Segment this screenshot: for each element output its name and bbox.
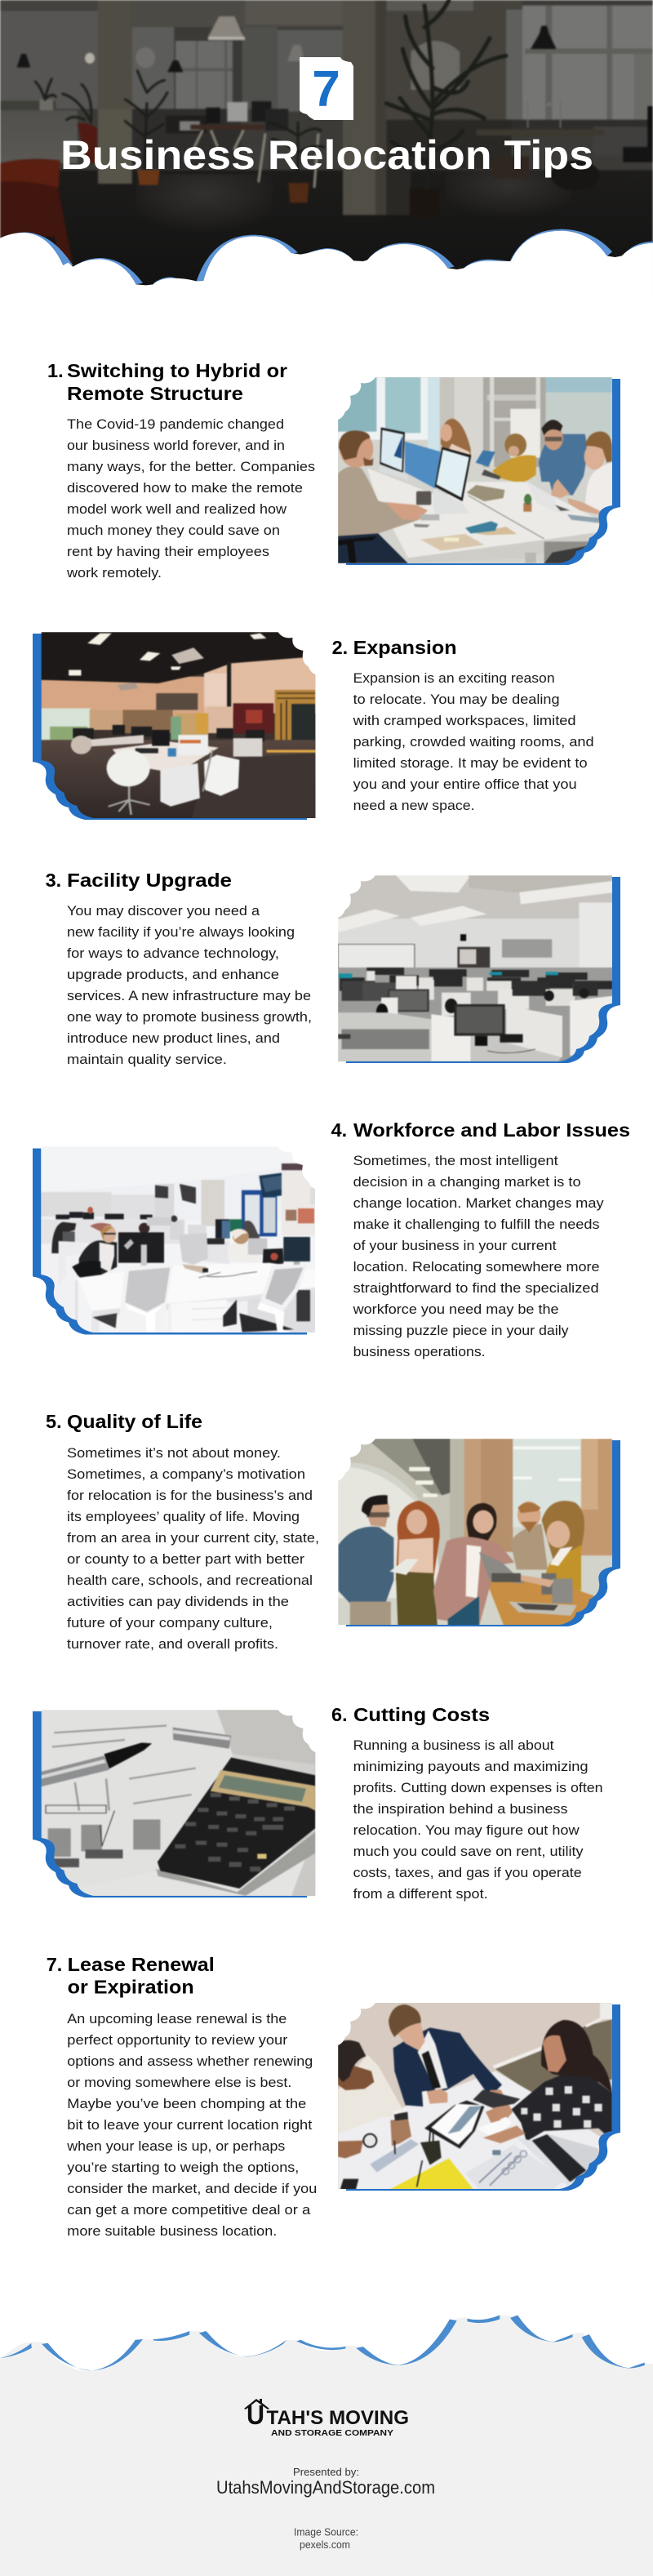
section 6: cutting costs [33, 1704, 603, 1902]
charts [465, 2145, 566, 2190]
body text 7: Maybe you’ve been chomping at the [67, 2096, 306, 2111]
body text 3: services. A new infrastructure may be [67, 988, 311, 1003]
pen holder [420, 2141, 442, 2165]
photo: computer training room [338, 875, 613, 1062]
presented by: Presented by: [293, 2466, 359, 2478]
far rows [338, 968, 613, 1062]
blue door [242, 1190, 277, 1236]
pen cap [173, 1728, 231, 1749]
body text 5: from an area in your current city, state, [67, 1530, 319, 1546]
body text 7: An upcoming lease renewal is the [67, 2011, 287, 2027]
body text 4: change location. Market changes may [353, 1195, 604, 1211]
number badge: 7 [312, 61, 340, 118]
front chairs [117, 1264, 174, 1333]
floor [0, 170, 653, 286]
body text 5: Sometimes, a company’s motivation [67, 1466, 305, 1482]
clipboard and papers [424, 2101, 484, 2149]
body text 6: Running a business is all about [353, 1737, 554, 1753]
body text 1 [66, 416, 315, 581]
section 1: switching to hybrid [47, 360, 620, 581]
calculator [158, 1758, 315, 1889]
heading 7 [47, 1954, 215, 1998]
body text 6 [353, 1737, 603, 1902]
body text 4: location. Relocating somewhere more [353, 1259, 600, 1275]
plants [35, 0, 506, 188]
person 4: man in beige [510, 1524, 548, 1569]
body text 7: bit to leave your current location right [67, 2117, 313, 2133]
body text 1: much money they could save on [67, 523, 280, 538]
company logo: U [247, 2400, 264, 2430]
monitors [380, 427, 405, 473]
heading 4: 4. [331, 1119, 347, 1141]
footer blue scallop accents [0, 2315, 645, 2371]
left wall [0, 0, 98, 109]
laptop [524, 480, 532, 485]
chair mid [179, 1233, 208, 1265]
body text 5: future of your company culture, [67, 1615, 273, 1631]
desk [367, 468, 604, 558]
body text 4: decision in a changing market is to [353, 1174, 581, 1190]
body text 3: introduce new product lines, and [67, 1030, 280, 1046]
back row [41, 708, 91, 741]
person 5: woman in yellow [541, 1501, 584, 1563]
body text 1: model work well and realized how [67, 501, 287, 517]
section 7: lease renewal [47, 1954, 620, 2239]
body text 4: of your business in your current [353, 1238, 557, 1253]
body text 4: workforce you need may be the [353, 1301, 559, 1317]
body text 3: You may discover you need a [67, 903, 260, 919]
body text 2: to relocate. You may be dealing [353, 692, 560, 707]
body text 4: Sometimes, the most intelligent [353, 1153, 558, 1168]
body text 2: with cramped workspaces, limited [353, 713, 576, 728]
title: Business Relocation Tips [60, 132, 593, 178]
red chairs [0, 159, 73, 268]
body text 7: can get a more competitive deal or a [67, 2202, 311, 2218]
body text 5: or county to a better part with better [67, 1551, 304, 1567]
blue photo accent 5 [346, 1440, 620, 1626]
pillars [98, 0, 132, 109]
blue divider [405, 442, 441, 488]
company logo: AND STORAGE COMPANY [271, 2428, 393, 2438]
body text 4: missing puzzle piece in your daily [353, 1323, 569, 1338]
person 1: man with blue sweater [339, 1527, 393, 1604]
skylights [69, 634, 267, 675]
tablet [473, 2089, 520, 2108]
white desk [78, 1263, 316, 1311]
body text 5: its employees’ quality of life. Moving [67, 1509, 300, 1524]
white desk [113, 741, 219, 773]
heading 1: Switching to Hybrid or [67, 360, 287, 381]
heading 7: or Expiration [68, 1977, 194, 1998]
body text 5: turnover rate, and overall profits. [67, 1636, 278, 1652]
body text 2 [353, 670, 594, 813]
image source: pexels.com [300, 2538, 350, 2551]
blue photo accent 2 [33, 634, 307, 820]
body text 7 [66, 2011, 317, 2239]
yellow folder [389, 2158, 473, 2190]
under-desk [169, 1302, 247, 1335]
people in back [441, 419, 471, 460]
section 3: facility upgrade [46, 870, 620, 1067]
heading 2: 2. [332, 637, 348, 658]
body text 1: rent by having their employees [67, 544, 269, 559]
phone [340, 2179, 358, 2190]
body text 1: work remotely. [66, 565, 162, 581]
heading 5: Quality of Life [67, 1411, 202, 1432]
heading 6: Cutting Costs [353, 1704, 490, 1725]
body text 6: from a different spot. [353, 1886, 488, 1902]
lamps [17, 26, 557, 72]
woman in hoodie [585, 463, 612, 514]
body text 1: discovered how to make the remote [67, 480, 303, 496]
body text 4: make it challenging to fulfill the needs [353, 1217, 600, 1232]
image source: Image Source: [294, 2526, 358, 2538]
body text 5: health care, schools, and recreational [67, 1573, 313, 1588]
heading 6: 6. [331, 1704, 348, 1725]
person 3: woman in pink [467, 1503, 496, 1542]
body text 3: one way to promote business growth, [67, 1009, 312, 1025]
planters [39, 100, 53, 110]
body text 6: relocation. You may figure out how [353, 1822, 580, 1838]
footer background with cloud edge [0, 2316, 653, 2576]
heading 1: 1. [47, 360, 64, 381]
body text 3: maintain quality service. [67, 1052, 227, 1067]
heading 7: 7. [47, 1954, 62, 1975]
body text 3: for ways to advance technology, [67, 945, 279, 961]
image source [294, 2526, 358, 2551]
body text 6: profits. Cutting down expenses is often [353, 1780, 603, 1795]
man in navy suit [393, 2027, 502, 2107]
photo: open office with black ceiling [41, 632, 317, 820]
photo: meeting around paperwork [337, 2002, 613, 2190]
front desks [338, 1012, 431, 1061]
heading 1 [47, 360, 287, 404]
person 2: woman [396, 1501, 440, 1580]
body text 3: upgrade products, and enhance [67, 967, 279, 982]
monitors front [118, 1232, 164, 1263]
logo house roof [244, 2399, 269, 2409]
body text 6: costs, taxes, and gas if you operate [353, 1865, 582, 1880]
photo: calculator, pen and paperwork [41, 1710, 316, 1898]
right wall and windows [387, 2, 522, 119]
desk items [416, 492, 431, 505]
heading 3: Facility Upgrade [67, 870, 232, 891]
heading 1: Remote Structure [67, 383, 243, 404]
body text 6: minimizing payouts and maximizing [353, 1759, 589, 1774]
table [338, 2071, 612, 2190]
body text 4: business operations. [353, 1344, 486, 1359]
body text 1: our business world forever, and in [67, 438, 285, 453]
heading 3: 3. [46, 870, 61, 891]
body text 7: more suitable business location. [67, 2223, 277, 2239]
photo: colleagues at a wooden counter [338, 1439, 613, 1626]
body text 1: The Covid-19 pandemic changed [67, 416, 284, 432]
man in white sweater [338, 2055, 402, 2133]
laptop [547, 2133, 604, 2182]
woman in plaid [541, 2020, 612, 2093]
header cloud edge with blue accent [0, 229, 653, 304]
heading 5: 5. [46, 1411, 62, 1432]
man with tan sweater [338, 466, 419, 536]
body text 2: you and your entire office that you [353, 776, 577, 792]
body text 5: Sometimes it’s not about money. [67, 1445, 281, 1461]
body text 2: Expansion is an exciting reason [353, 670, 555, 686]
central wall and windows [132, 0, 343, 27]
wooden table [483, 1573, 600, 1626]
body text 5 [67, 1445, 319, 1652]
heading 4: Workforce and Labor Issues [353, 1119, 630, 1141]
heading 2: Expansion [353, 637, 457, 658]
back rows [55, 1211, 153, 1220]
back desks [73, 725, 264, 741]
person in white right [227, 1243, 261, 1263]
company logo: TAH'S MOVING [266, 2407, 409, 2429]
body text 6: the inspiration behind a business [353, 1801, 568, 1817]
body text 7: or moving somewhere else is best. [67, 2075, 291, 2090]
desks and equipment [166, 116, 207, 133]
white chair [107, 750, 150, 786]
photo: team at desks [337, 376, 615, 566]
pen [41, 1755, 109, 1786]
body text 2: limited storage. It may be evident to [353, 755, 588, 771]
header photo: dark office [0, 0, 653, 302]
body text 7: consider the market, and decide if you [67, 2181, 317, 2196]
photo: bright open office [41, 1146, 316, 1335]
body text 7: options and assess whether renewing [67, 2053, 313, 2069]
section 4: workforce and labor [33, 1119, 630, 1359]
body text 5: activities can pay dividends in the [67, 1594, 289, 1609]
blue photo accent 4 [33, 1148, 307, 1334]
blue photo accent 6 [33, 1711, 307, 1898]
body text 4: straightforward to find the specialized [353, 1280, 599, 1296]
calculator shadow [156, 1832, 315, 1896]
body text 4 [353, 1153, 604, 1359]
section 5: quality of life [46, 1411, 620, 1652]
items [479, 1552, 525, 1584]
number badge [300, 57, 353, 120]
blue photo accent 1 [346, 379, 620, 565]
body text 7: when your lease is up, or perhaps [66, 2138, 285, 2154]
body text 2: need a new space. [353, 798, 475, 813]
blue photo accent 7 [346, 2004, 620, 2191]
body text 7: perfect opportunity to review your [67, 2032, 288, 2048]
body text 5: for relocation is for the business’s and [67, 1488, 313, 1503]
section 2: expansion [33, 632, 594, 820]
body text 7: you’re starting to weigh the options, [67, 2160, 299, 2175]
body text 6: much you could save on rent, utility [353, 1844, 584, 1859]
body text 1: many ways, for the better. Companies [67, 459, 315, 474]
company logo [244, 2399, 409, 2438]
body text 2: parking, crowded waiting rooms, and [353, 734, 594, 750]
body text 3: new facility if you’re always looking [67, 924, 295, 940]
website: UtahsMovingAndStorage.com [216, 2477, 435, 2498]
heading 7: Lease Renewal [68, 1954, 215, 1975]
blue photo accent 3 [346, 877, 620, 1063]
woman on phone [79, 1240, 117, 1275]
body text 3 [67, 903, 312, 1067]
